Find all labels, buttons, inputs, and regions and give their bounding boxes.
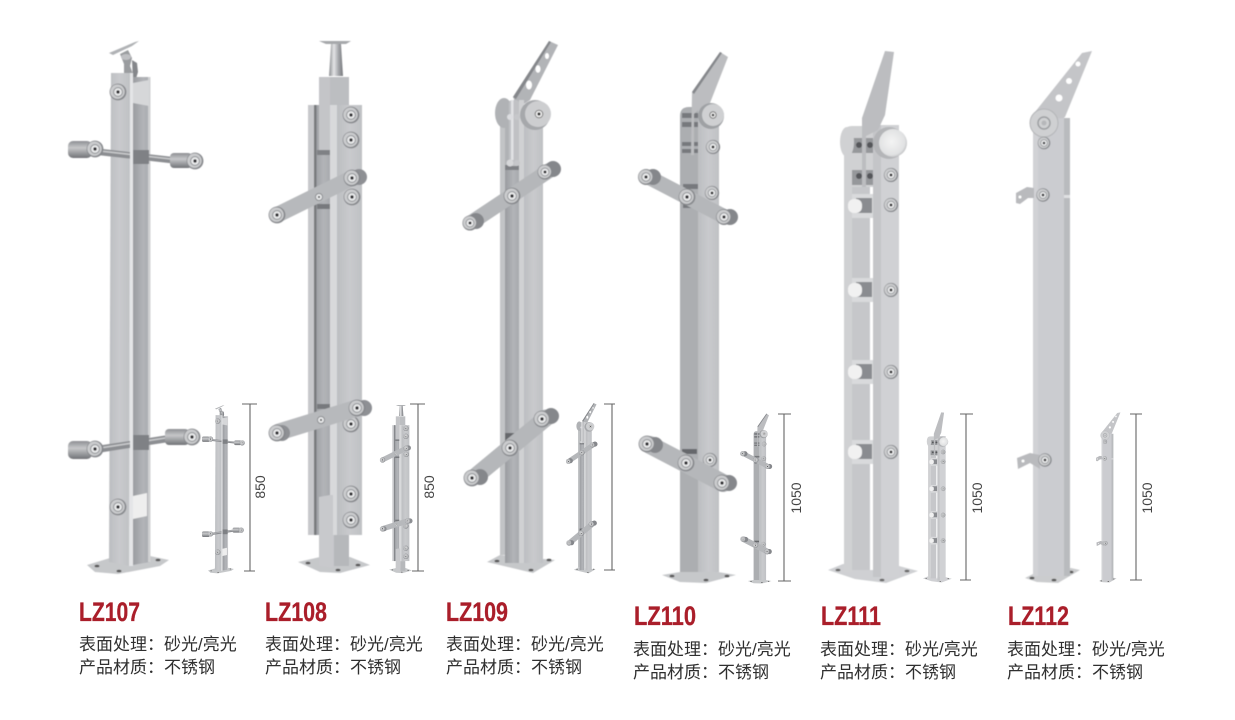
product post: LZ111 xyxy=(828,51,918,583)
spec: surface treatment: 表面处理：砂光/亮光 xyxy=(633,640,791,659)
spec: material: 产品材质：不锈钢 xyxy=(265,658,401,677)
spec: material: 产品材质：不锈钢 xyxy=(446,658,582,677)
model name: LZ110: LZ110 xyxy=(634,601,696,631)
product post: LZ109 xyxy=(462,41,561,573)
product post: LZ108 xyxy=(269,41,372,573)
dimension: 1050: 1050 xyxy=(1139,482,1155,514)
small product view: LZ107 xyxy=(202,405,245,573)
spec: surface treatment: 表面处理：砂光/亮光 xyxy=(79,635,237,654)
spec: surface treatment: 表面处理：砂光/亮光 xyxy=(820,640,978,659)
small product view: LZ110 xyxy=(740,414,772,584)
dimension: 1050: 1050 xyxy=(788,482,804,514)
spec: material: 产品材质：不锈钢 xyxy=(1007,663,1143,682)
small product view: LZ111 xyxy=(923,412,952,583)
spec: material: 产品材质：不锈钢 xyxy=(633,663,769,682)
spec: surface treatment: 表面处理：砂光/亮光 xyxy=(1007,640,1165,659)
dimension: 850 xyxy=(242,404,268,571)
dimension: 850: 850 xyxy=(252,475,268,499)
product post: LZ110 xyxy=(638,52,738,583)
spec: material: 产品材质：不锈钢 xyxy=(820,663,956,682)
small product view: LZ108 xyxy=(380,405,413,573)
product post: LZ107 xyxy=(68,41,203,574)
model name: LZ109: LZ109 xyxy=(446,597,508,627)
dimension: 1050 xyxy=(778,414,804,581)
small product view: LZ112 xyxy=(1096,412,1120,583)
dimension: 850 xyxy=(410,404,437,571)
panel: LZ110 xyxy=(633,52,804,682)
dimension: 1050 xyxy=(1130,414,1155,580)
dimension: 850: 850 xyxy=(421,475,437,499)
dimension: 1050: 1050 xyxy=(969,482,985,514)
model name: LZ108: LZ108 xyxy=(265,597,327,627)
small product view: LZ109 xyxy=(566,403,598,573)
model name: LZ111: LZ111 xyxy=(821,601,881,631)
spec: material: 产品材质：不锈钢 xyxy=(79,658,215,677)
spec: surface treatment: 表面处理：砂光/亮光 xyxy=(446,635,604,654)
dimension line xyxy=(604,404,615,570)
panel: LZ107 xyxy=(68,41,268,677)
panel: LZ108 xyxy=(265,41,437,677)
spec: surface treatment: 表面处理：砂光/亮光 xyxy=(265,635,423,654)
panel: LZ111 xyxy=(820,51,985,682)
panel: LZ112 xyxy=(1007,51,1165,682)
model name: LZ112: LZ112 xyxy=(1008,601,1069,631)
dimension: 1050 xyxy=(960,414,985,580)
panel: LZ109 xyxy=(446,41,615,677)
model name: LZ107: LZ107 xyxy=(79,597,140,627)
product post: LZ112 xyxy=(1016,51,1092,583)
